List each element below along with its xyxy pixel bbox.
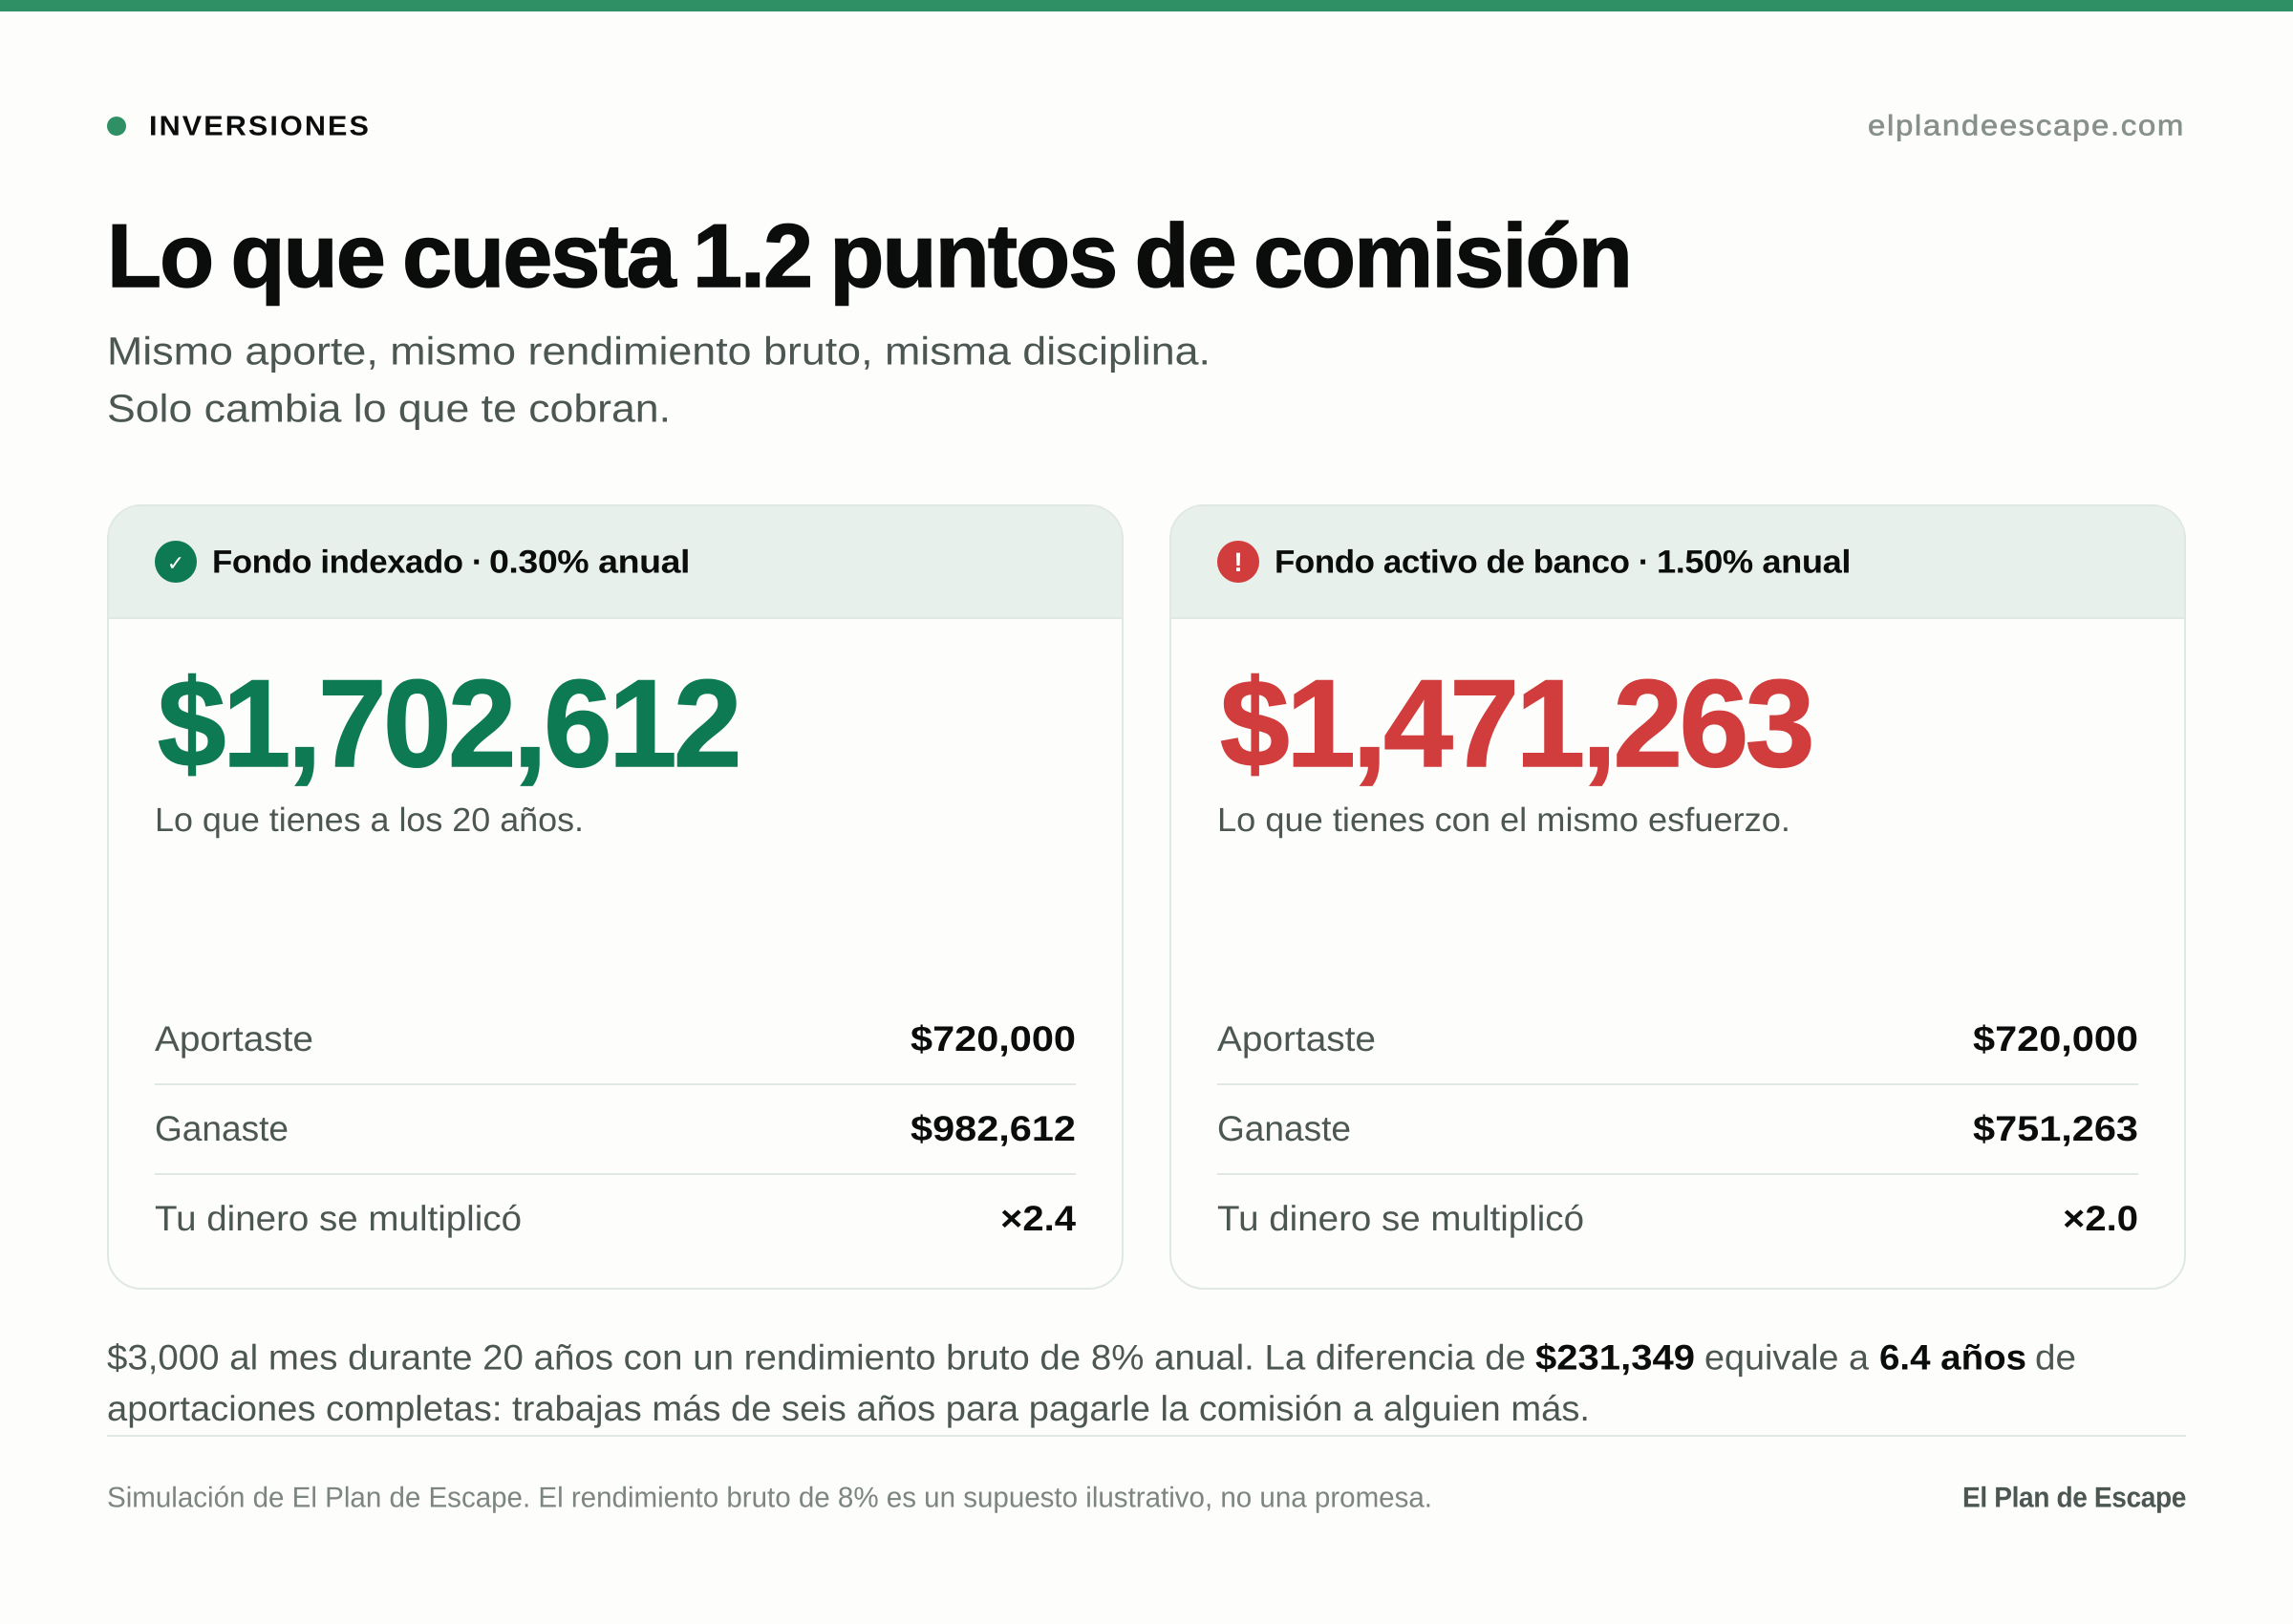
- stats table: fondo activo: $720,000: [1973, 1019, 2138, 1058]
- icon: warning: [1217, 541, 1259, 583]
- panel: fondo activo de banco: [1170, 505, 2185, 1289]
- big number: 1,471,263: $1,471,263: [1220, 653, 1811, 793]
- panel heading: fondo activo: [1275, 545, 1851, 581]
- stats table: fondo indexado: ×2.4: [1000, 1199, 1076, 1238]
- icon: check: [155, 541, 197, 583]
- stats table: fondo activo: Aportaste: [1217, 1019, 1376, 1058]
- summary paragraph: [107, 1337, 2076, 1428]
- stats table: fondo activo: $751,263: [1973, 1109, 2138, 1148]
- summary paragraph: 6.4 años: [1879, 1337, 2026, 1378]
- summary paragraph: $3,000 al mes durante 20 años con un rendimiento bruto de 8% anual. La diferencia de: [107, 1337, 1526, 1378]
- panel heading: fondo indexado: [212, 545, 690, 581]
- stats table: fondo activo: Tu dinero se multiplicó: [1217, 1199, 1584, 1238]
- subtitle: Solo cambia lo que te cobran.: [107, 386, 671, 430]
- kicker: inversiones: INVERSIONES: [149, 111, 371, 141]
- panel heading: fondo indexado: 0.30% anual: [489, 545, 690, 581]
- panel heading: fondo activo: 1.50% anual: [1657, 545, 1851, 581]
- panel header: fondo indexado: [109, 506, 1122, 618]
- stats table: fondo indexado: Aportaste: [155, 1019, 313, 1058]
- caption: a los 20 años: Lo que tienes a los 20 años.: [155, 801, 584, 839]
- caption: mismo esfuerzo: Lo que tienes con el mismo esfuerzo.: [1217, 801, 1790, 839]
- stats table: fondo indexado: Ganaste: [155, 1109, 289, 1148]
- site url: elplandeescape.com: [1868, 111, 2185, 141]
- panel heading: fondo activo: Fondo activo de banco ·: [1275, 545, 1649, 581]
- subtitle: Mismo aporte, mismo rendimiento bruto, misma disciplina.: [107, 329, 1211, 373]
- summary paragraph: de: [2035, 1337, 2076, 1378]
- summary paragraph: aportaciones completas: trabajas más de seis años para pagarle la comisión a alguien más.: [107, 1389, 1590, 1428]
- stats table: fondo indexado: [155, 1019, 1076, 1238]
- footnote: Simulación de El Plan de Escape. El rendimiento bruto de 8% es un supuesto ilustrativo, no una promesa.: [107, 1483, 1432, 1513]
- stats table: fondo activo: ×2.0: [2063, 1199, 2138, 1238]
- panel header: fondo activo: [1171, 506, 2184, 618]
- icon: warning: !: [1233, 547, 1243, 577]
- footer brand: El Plan de Escape: [1962, 1483, 2186, 1513]
- stats table: fondo indexado: $982,612: [911, 1109, 1076, 1148]
- summary paragraph: $231,349: [1535, 1337, 1695, 1378]
- panel: fondo indexado: [108, 505, 1123, 1289]
- stats table: fondo activo: Ganaste: [1217, 1109, 1351, 1148]
- panel heading: fondo indexado: Fondo indexado ·: [212, 545, 482, 581]
- summary paragraph: equivale a: [1704, 1337, 1869, 1378]
- stats table: fondo activo: [1217, 1019, 2138, 1238]
- top accent bar: [0, 0, 2293, 11]
- stats table: fondo indexado: $720,000: [911, 1019, 1076, 1058]
- title: Lo que cuesta 1.2 puntos de comisión: [107, 205, 1631, 306]
- big number: 1,702,612: $1,702,612: [158, 653, 739, 793]
- icon: check: ✓: [167, 552, 184, 576]
- subtitle: [107, 329, 1211, 430]
- stats table: fondo indexado: Tu dinero se multiplicó: [155, 1199, 522, 1238]
